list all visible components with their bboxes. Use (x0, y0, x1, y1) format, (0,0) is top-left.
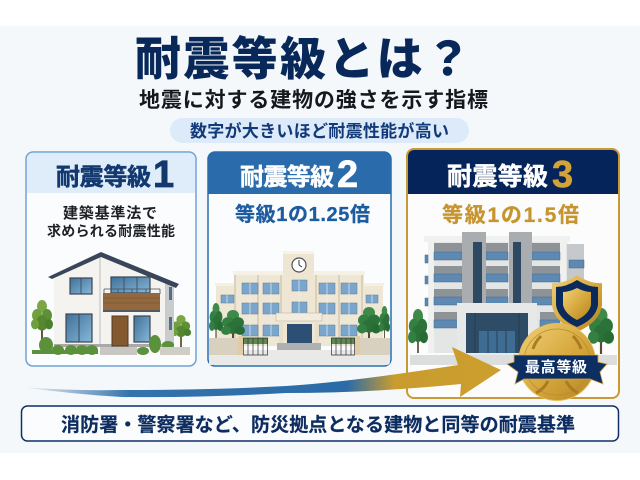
grade 1 header: 耐震等級 (56, 164, 151, 191)
grade 1 header (27, 153, 195, 196)
pill: key message: 数字が大きいほど耐震性能が高い (190, 121, 449, 141)
grade 1 description: 建築基準法で (63, 204, 157, 222)
illustration: school building (209, 251, 390, 365)
callout: bottom note (22, 406, 618, 441)
panel: grade 2 (208, 152, 391, 366)
subtitle: 地震に対する建物の強さを示す指標 (139, 89, 488, 112)
callout: bottom note: 消防署・警察署など、防災拠点となる建物と同等の耐震基準 (61, 414, 575, 436)
arrow (22, 347, 501, 397)
illustration: detached house (31, 252, 191, 355)
icon: gold medal badge (507, 324, 607, 400)
grade 1 description (47, 204, 175, 239)
icon: shield (552, 275, 602, 332)
grade 3 header: 3 (552, 154, 573, 196)
grade 3 header: 耐震等級 (447, 163, 548, 191)
panel: grade 3 (407, 149, 619, 398)
grade 3 description: 等級1の1.5倍 (442, 204, 579, 227)
grade 1 header: 1 (153, 154, 174, 196)
grade 2 header (208, 152, 391, 196)
panel: grade 1 (26, 152, 196, 366)
pill: key message (170, 118, 469, 143)
title: 耐震等級とは？ (135, 33, 471, 85)
clock (292, 258, 306, 272)
grade 2 header: 2 (337, 154, 358, 196)
grade 2 header: 耐震等級 (240, 164, 334, 191)
illustration: apartment building (408, 232, 617, 365)
medal label: 最高等級 (525, 358, 587, 376)
grade 1 description: 求められる耐震性能 (47, 223, 175, 239)
grade 3 header (408, 150, 618, 196)
grade 2 description: 等級1の1.25倍 (235, 203, 370, 226)
